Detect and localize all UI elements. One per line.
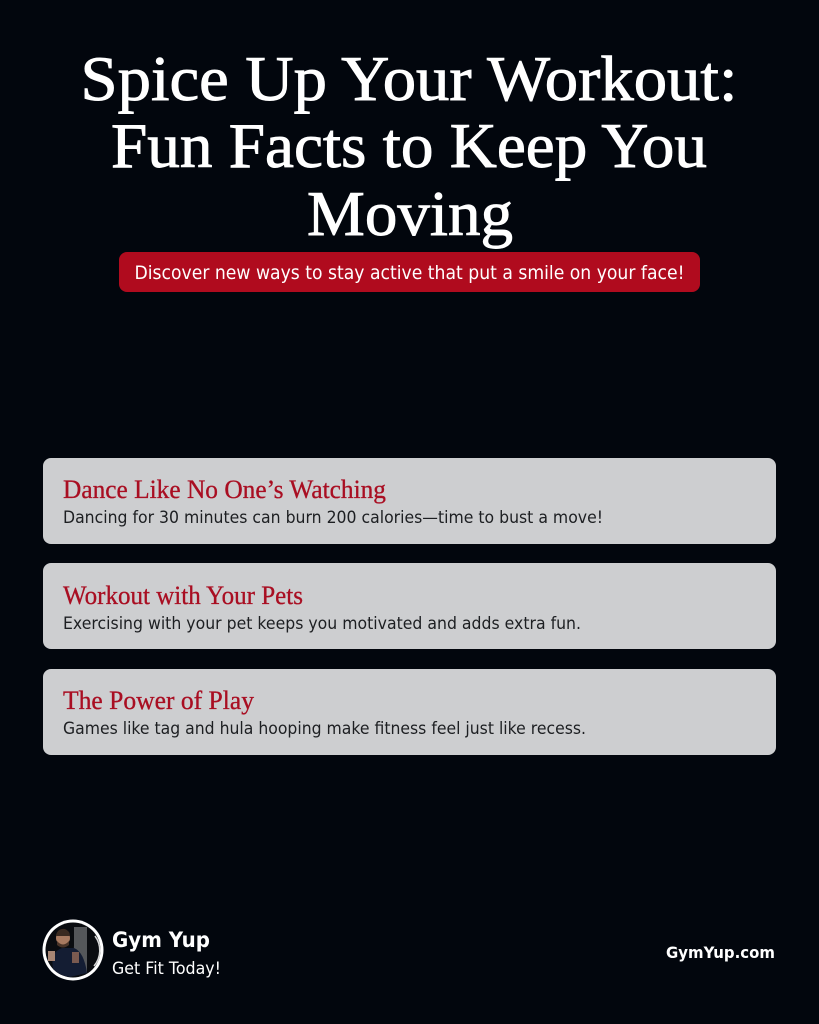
title (80, 44, 738, 249)
heading: play: The Power of Play (63, 686, 254, 715)
icon: avatar (42, 920, 104, 980)
website: GymYup.com (666, 943, 775, 962)
subtitle banner: Discover new ways to stay active that put a smile on your face! (134, 262, 684, 284)
brand name: Gym Yup (112, 928, 210, 952)
tagline: Get Fit Today! (112, 959, 221, 978)
text: dance: Dancing for 30 minutes can burn 200 calories—time to bust a move! (63, 508, 603, 528)
title: Moving (307, 179, 513, 249)
text: play: Games like tag and hula hooping make fitness feel just like recess. (63, 719, 586, 739)
heading: dance: Dance Like No One’s Watching (63, 475, 386, 504)
title: Spice Up Your Workout: (80, 44, 738, 114)
title: Fun Facts to Keep You (111, 111, 707, 181)
panel: play (43, 669, 776, 755)
panel: pets (43, 563, 776, 649)
panel: dance (43, 458, 776, 544)
heading: pets: Workout with Your Pets (63, 581, 303, 610)
subtitle banner (119, 252, 700, 292)
text: pets: Exercising with your pet keeps you motivated and adds extra fun. (63, 614, 581, 634)
